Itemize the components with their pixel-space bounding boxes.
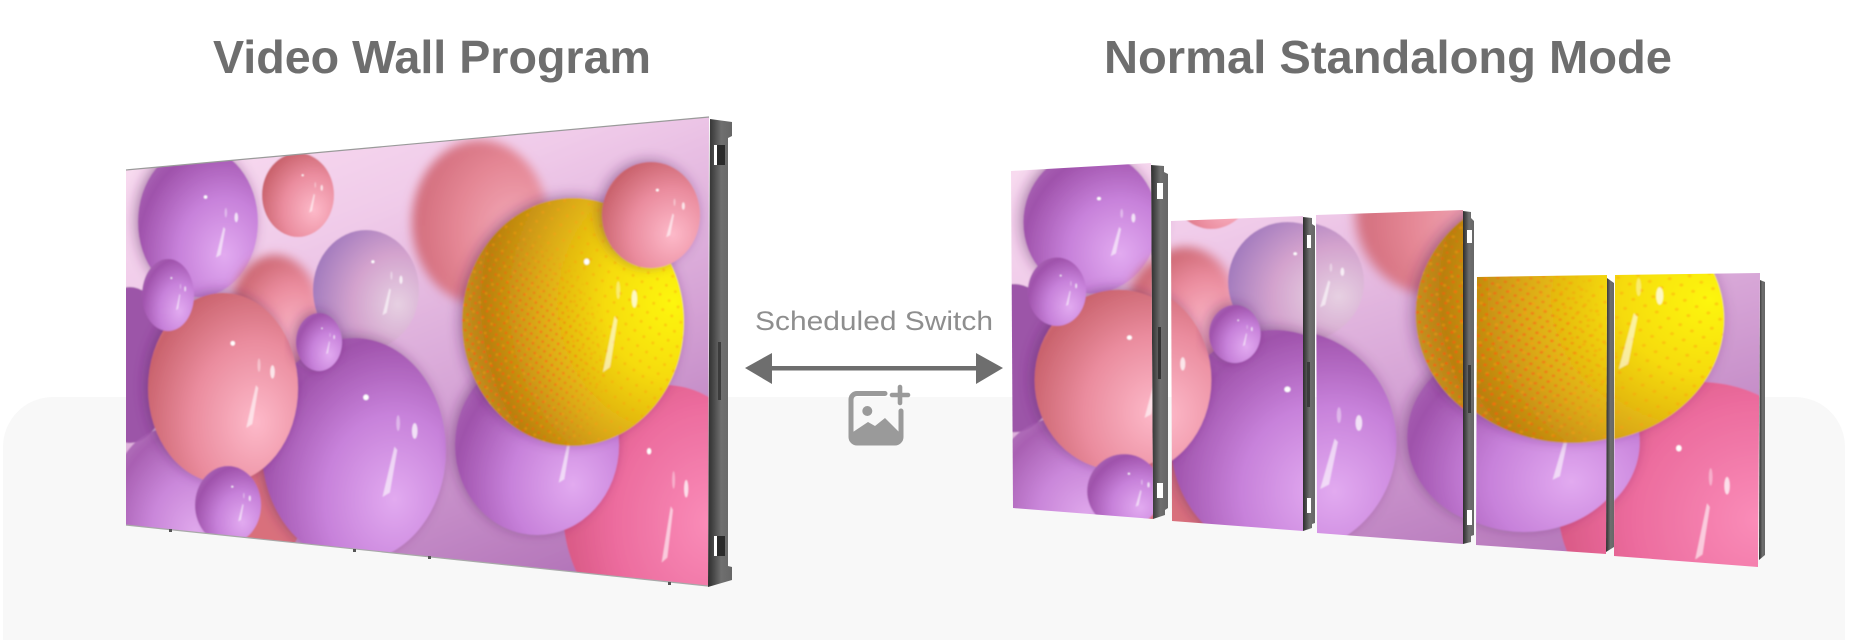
icon: add image — [851, 387, 908, 443]
heading: Normal Standalong Mode: Normal Standalong Mode — [1104, 31, 1672, 83]
background floor panel — [3, 397, 1845, 640]
standalone panel 4 — [1476, 275, 1614, 554]
double-headed arrow — [745, 353, 1003, 384]
scheduled switch label: Scheduled Switch — [755, 306, 993, 336]
standalone panel 5 — [1614, 273, 1765, 567]
standalone panel 2 — [1171, 216, 1315, 531]
standalone panel 3 — [1316, 210, 1474, 544]
video wall display — [126, 116, 732, 587]
standalone panel 1 — [1011, 163, 1168, 519]
heading: Video Wall Program: Video Wall Program — [213, 31, 651, 83]
